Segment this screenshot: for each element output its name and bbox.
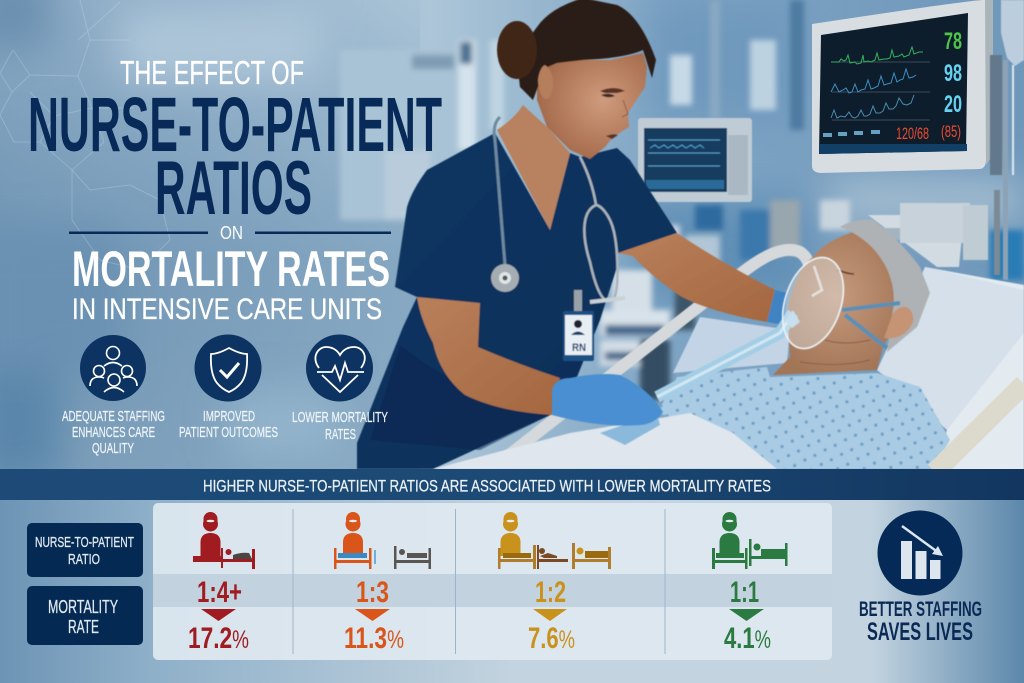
bed frame foreground — [935, 384, 1024, 472]
benefit: adequate staffing: ENHANCES CARE — [72, 424, 155, 441]
bed rail — [500, 250, 810, 462]
id badge — [563, 311, 594, 361]
blue glove — [552, 374, 663, 426]
column 1:4+ — [188, 512, 255, 655]
title block: NURSE-TO-PATIENT — [28, 82, 442, 168]
oxygen tube — [657, 313, 793, 397]
hair — [519, 0, 656, 100]
column 1:2: 7.6% — [528, 622, 575, 655]
scrubs — [357, 133, 677, 469]
pillow and mattress — [673, 267, 1024, 470]
column 1:3: 1:3 — [356, 576, 389, 609]
stethoscope — [494, 117, 505, 265]
row labels: MORTALITY — [48, 597, 118, 617]
column 1:3 — [334, 512, 431, 655]
IV bag and pole — [990, 0, 1024, 280]
benefit: improved outcomes — [179, 334, 278, 441]
row labels: RATIO — [68, 551, 100, 568]
column 1:1 — [712, 512, 788, 655]
callout: better staffing saves lives — [859, 510, 982, 646]
title block: ON — [220, 223, 243, 243]
benefit: adequate staffing — [62, 335, 165, 457]
right glove — [767, 290, 787, 325]
background photo — [0, 0, 1024, 480]
monitor: vital signs: 20 — [944, 91, 962, 118]
bottom background — [0, 470, 1024, 683]
column 1:2: 1:2 — [535, 576, 566, 609]
nurse — [357, 0, 787, 469]
icon: nurse with two patients — [498, 512, 611, 569]
benefit: lower mortality — [292, 334, 388, 443]
icon: nurse with four or more patients — [193, 512, 255, 569]
comparison panel — [153, 503, 832, 660]
column 1:1: 4.1% — [724, 622, 771, 655]
column 1:4+: 1:4+ — [197, 576, 242, 609]
nurse: RN — [572, 342, 586, 354]
mask — [772, 250, 854, 356]
monitor: vital signs: (85) — [941, 122, 961, 141]
icon: nurse with one patient — [712, 512, 788, 569]
title block: THE EFFECT OF — [120, 54, 304, 91]
neck and chest — [497, 105, 570, 230]
left arm — [417, 297, 560, 415]
benefit: lower mortality: RATES — [325, 426, 356, 443]
benefit: adequate staffing: ADEQUATE STAFFING — [62, 408, 165, 425]
benefit: lower mortality: LOWER MORTALITY — [292, 409, 388, 426]
monitor: vital signs — [812, 0, 993, 173]
icon: nurse with three patients — [334, 512, 431, 569]
title block — [28, 54, 442, 326]
monitor: vital signs: 120/68 — [896, 124, 929, 143]
icon: team — [80, 335, 146, 401]
right arm — [618, 233, 775, 322]
patient head — [773, 230, 900, 375]
title block: RATIOS — [155, 146, 312, 231]
banner — [0, 469, 1024, 500]
monitor: vital signs: 98 — [944, 60, 962, 87]
benefit: improved outcomes: IMPROVED — [203, 408, 255, 425]
monitor: vital signs: 78 — [944, 28, 962, 55]
patient — [433, 220, 950, 469]
patient hair — [840, 220, 930, 352]
medical equipment behind patient — [868, 190, 1000, 275]
column 1:2 — [498, 512, 611, 655]
row labels: NURSE-TO-PATIENT — [35, 534, 134, 551]
column 1:4+: 17.2% — [188, 622, 249, 655]
title block: IN INTENSIVE CARE UNITS — [72, 293, 382, 326]
row labels: RATE — [68, 617, 99, 637]
benefit: adequate staffing: QUALITY — [92, 440, 134, 457]
background molecular hex pattern — [0, 0, 170, 270]
face — [537, 53, 647, 159]
title block: MORTALITY RATES — [72, 241, 390, 297]
banner: HIGHER NURSE-TO-PATIENT RATIOS ARE ASSOCIATED WITH LOWER MORTALITY RATES — [203, 476, 771, 496]
sheet — [433, 413, 777, 469]
benefit: improved outcomes: PATIENT OUTCOMES — [179, 424, 278, 441]
gown — [657, 367, 950, 469]
column 1:1: 1:1 — [730, 576, 759, 609]
monitor: mid background — [638, 118, 752, 202]
icon: declining bars — [878, 510, 962, 596]
icon: shield check — [194, 334, 262, 402]
row labels — [27, 523, 143, 645]
icon: heart pulse — [306, 334, 373, 402]
column 1:3: 11.3% — [344, 622, 404, 655]
